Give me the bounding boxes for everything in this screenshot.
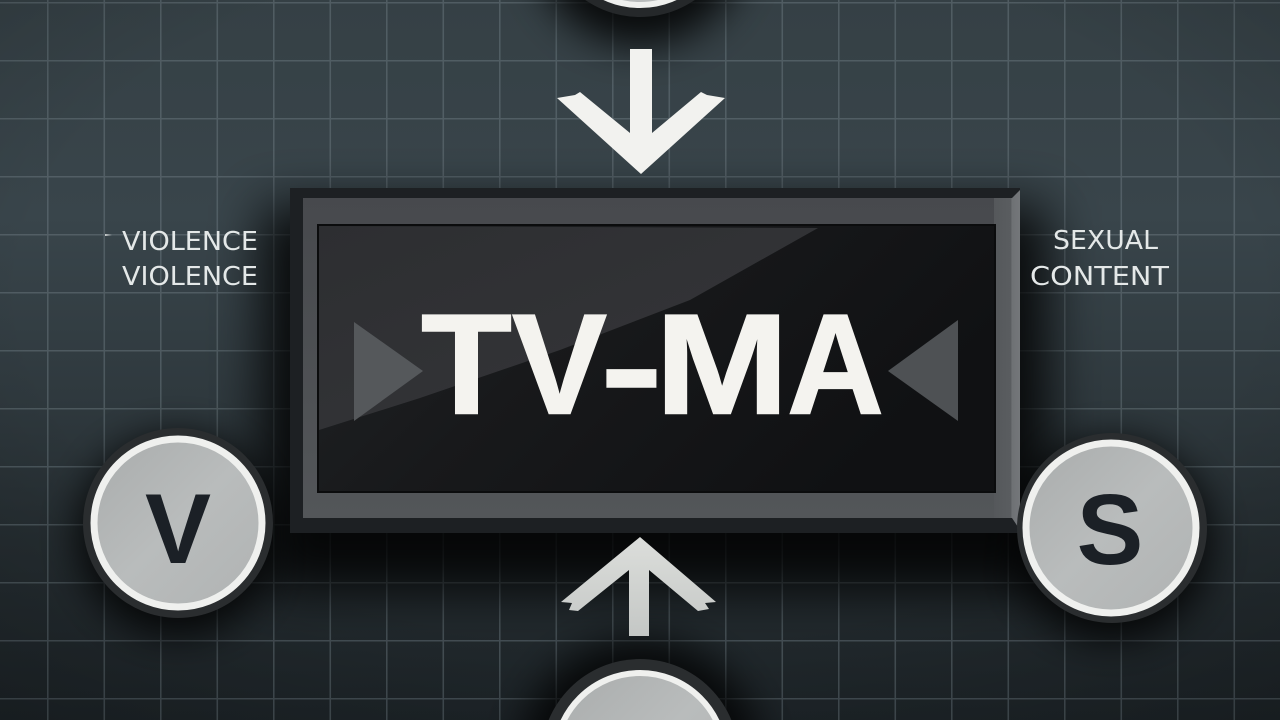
title: TV-MA: V [512, 286, 607, 444]
title: TV-MA: - [600, 288, 663, 446]
title: TV-MA: A [787, 286, 884, 444]
title: TV-MA: M [655, 286, 789, 444]
rating panel [290, 188, 1020, 533]
label: violence: VIOLENCE [122, 262, 258, 292]
icon: S badge: S [1077, 474, 1143, 586]
label: violence: VIOLENCE [122, 227, 258, 257]
icon: right triangle [888, 320, 958, 421]
panel: right frame edge [994, 190, 1020, 530]
label: violence [105, 227, 258, 292]
arrow: top pointing down [557, 49, 725, 174]
panel: frame bevel [303, 198, 1003, 518]
icon: S badge [1017, 433, 1207, 623]
icon: bottom badge cropped [541, 659, 739, 720]
label: sexual content: SEXUAL [1053, 226, 1159, 256]
label: sexual content: CONTENT [1030, 262, 1169, 292]
panel: dark screen [318, 225, 995, 492]
icon: top badge cropped [543, 0, 737, 17]
icon: left triangle [354, 322, 423, 421]
icon: V badge: V [145, 473, 211, 584]
title: TV-MA: T [421, 286, 512, 444]
panel: outer frame [290, 188, 1020, 533]
label: sexual content [1030, 226, 1169, 292]
arrow: bottom pointing up [561, 537, 716, 636]
icon: V badge [83, 428, 273, 618]
